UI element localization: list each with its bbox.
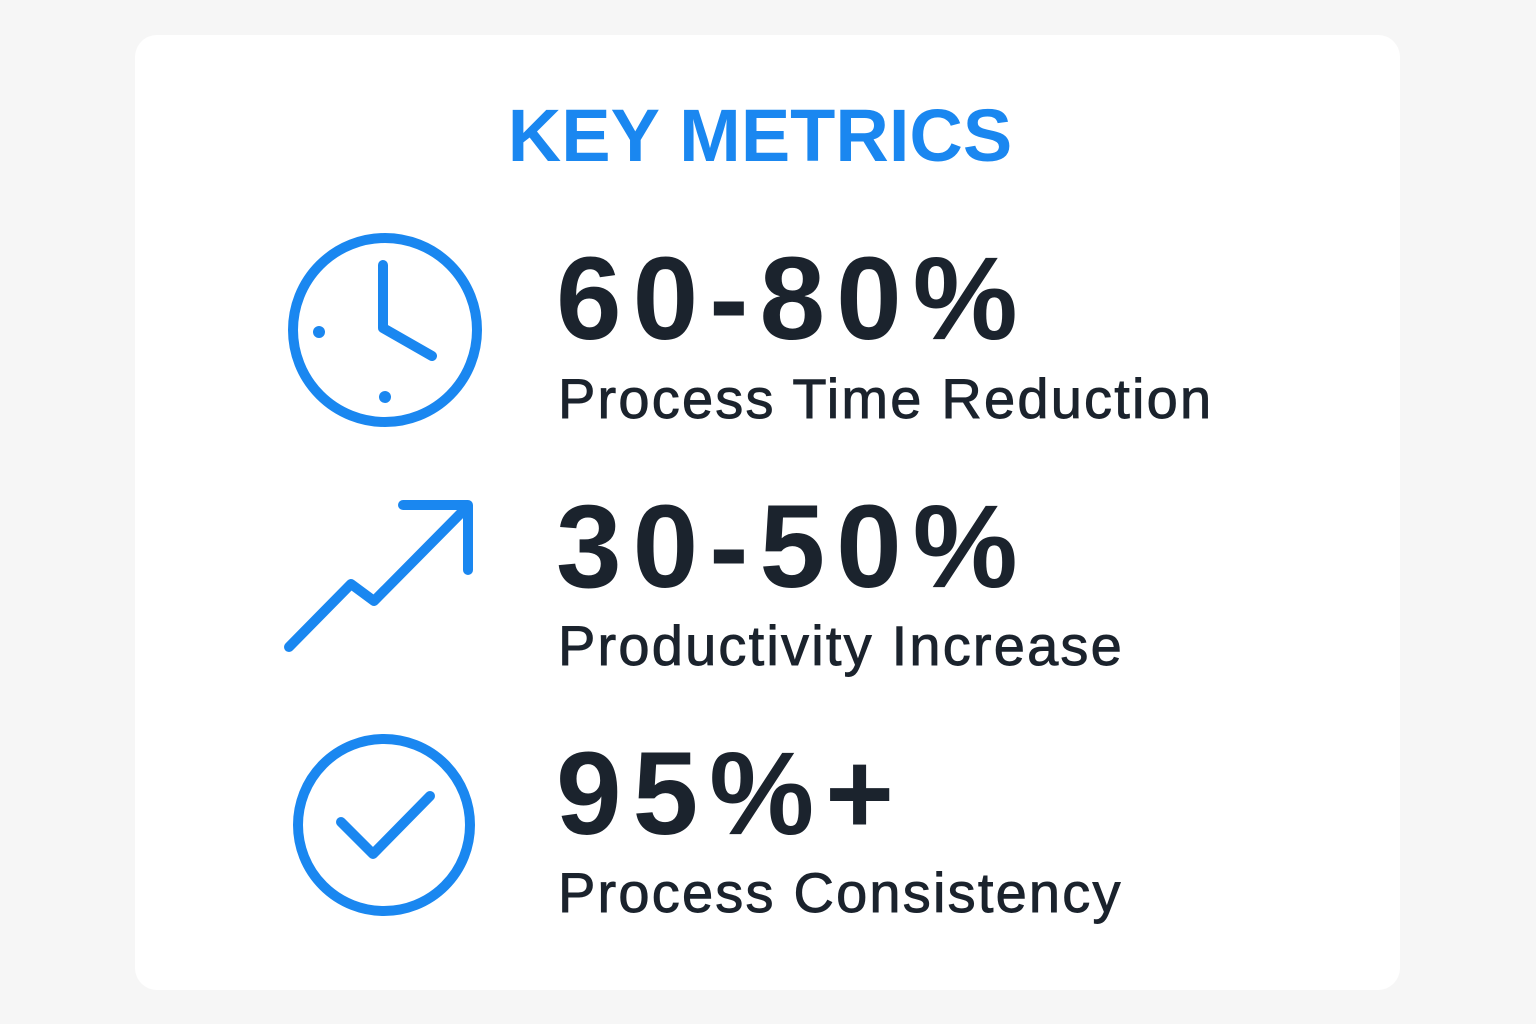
number: 95%+: 95%+ <box>556 728 905 860</box>
panel: card <box>135 35 1400 990</box>
label: process time reduction: Process Time Reduction <box>558 367 1213 430</box>
label: process consistency: Process Consistency <box>558 861 1123 924</box>
title: KEY METRICS <box>508 94 1012 177</box>
number: 30-50%: 30-50% <box>556 481 1029 613</box>
number: 60-80%: 60-80% <box>556 233 1029 365</box>
label: productivity increase: Productivity Increase <box>558 614 1124 677</box>
